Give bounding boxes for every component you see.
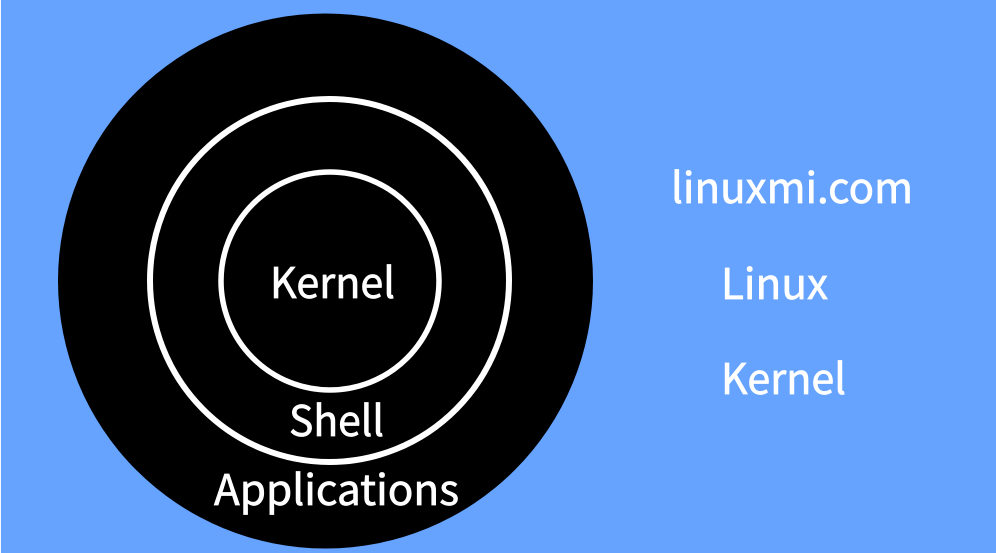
shell ring (150, 99, 509, 462)
label: Applications: Applications (214, 457, 459, 518)
label: Shell: Shell (289, 388, 384, 449)
kernel ring (221, 172, 439, 390)
applications layer circle (58, 14, 593, 548)
heading: Kernel: Kernel (721, 346, 846, 407)
label: Kernel: Kernel (270, 250, 395, 311)
heading: Linux: Linux (721, 251, 828, 312)
diagram: concentric layers (58, 14, 593, 548)
site name: linuxmi.com (671, 155, 913, 216)
